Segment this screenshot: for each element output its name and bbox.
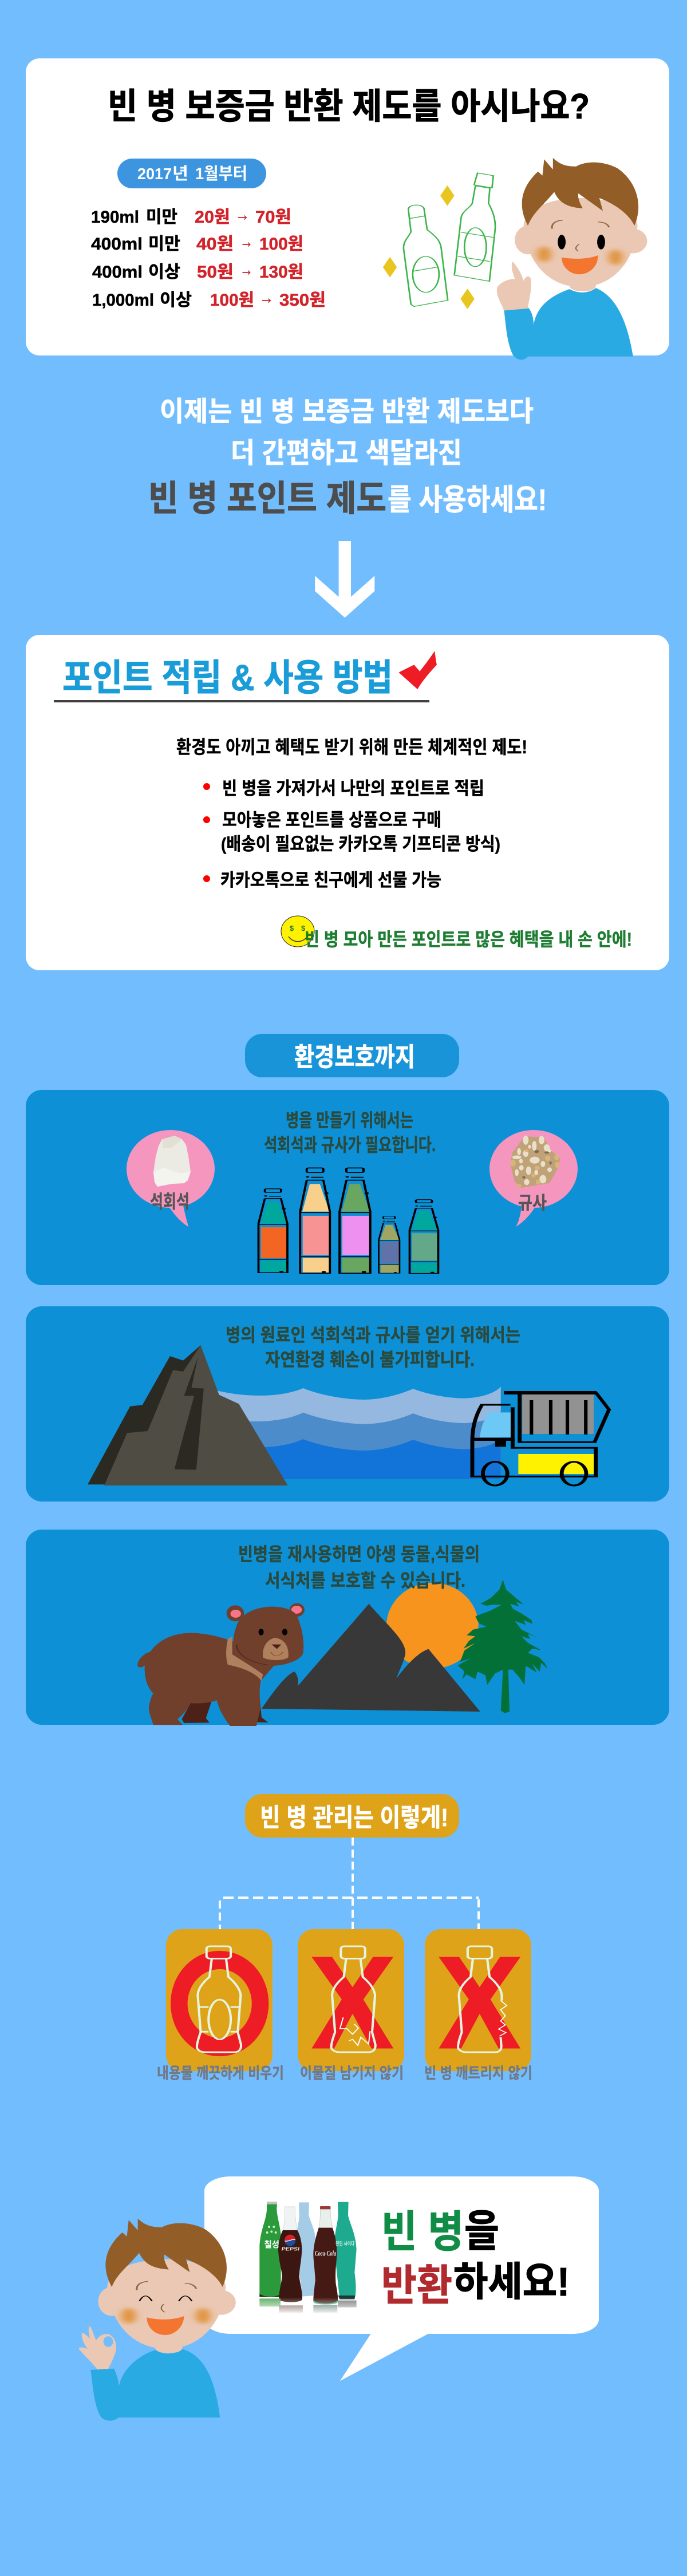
icon: X mark with broken bottle: [439, 1946, 520, 2052]
text block: switch to the point system: 빈 병 포인트 제도: [148, 479, 386, 519]
deposit price list: →: [240, 232, 253, 251]
panel text: [238, 1544, 480, 1591]
panel text: 자연환경 훼손이 불가피합니다.: [265, 1349, 475, 1370]
bubble: silica sand: 규사: [518, 1193, 547, 1213]
badge: since January 2017: 년: [172, 164, 188, 183]
illustration: mountains: [262, 1604, 480, 1712]
heading: 포인트 적립 & 사용 방법: [62, 657, 393, 698]
text block: switch to the point system: 더 간편하고 색달라진: [231, 438, 462, 469]
connector: dashed tree lines: [220, 1838, 479, 1930]
panel text: [226, 1325, 520, 1370]
illustration: pine tree: [458, 1579, 548, 1713]
title: 빈 병 보증금 반환 제도를 아시나요?: [108, 87, 590, 127]
deposit price list: 1,000ml: [92, 291, 154, 310]
illustration: rocky mountain: [88, 1345, 288, 1485]
deposit price list: →: [259, 289, 274, 307]
bubble shape: [204, 2176, 599, 2381]
deposit price list: 50원: [197, 263, 234, 282]
deposit price list: 400ml: [91, 235, 143, 254]
bullet list: 빈 병을 가져가서 나만의 포인트로 적립: [222, 779, 484, 799]
text: return empty bottles: [381, 2207, 570, 2309]
caption: 내용물 깨끗하게 비우기: [157, 2065, 284, 2082]
photo illustration: soda bottles: 천연 사이다: [335, 2241, 355, 2247]
bullet list: [203, 779, 500, 890]
illustration: dump truck: [471, 1391, 609, 1485]
text block: switch to the point system: 를 사용하세요!: [388, 484, 547, 517]
heading underline: [54, 700, 429, 702]
panel background: [26, 1530, 669, 1725]
text: return empty bottles: 반환: [381, 2262, 452, 2309]
panel text: 빈병을 재사용하면 야생 동물,식물의: [238, 1544, 480, 1564]
badge: since January 2017: [117, 159, 266, 188]
bullet list: 카카오톡으로 친구에게 선물 가능: [220, 870, 441, 890]
deposit price list: 미만: [148, 235, 180, 254]
panel background: [26, 635, 669, 970]
photo illustration: soda bottles: PEPSI: [282, 2246, 300, 2251]
illustration: sun: [386, 1583, 479, 1669]
icon: circle mark with bottle: [171, 1946, 269, 2056]
deposit price list: 미만: [146, 208, 177, 227]
photo illustration: soda bottles: Coca-Cola: [315, 2250, 337, 2258]
heading pill: environmental protection: [245, 1034, 459, 1077]
illustration: brown bear: [137, 1603, 305, 1726]
icon: smiling boy with OK hand: [79, 2219, 236, 2421]
deposit price list: →: [235, 206, 250, 224]
icon: money smiley: $: [290, 924, 294, 933]
heading pill: bottle care: 빈 병 관리는 이렇게!: [260, 1804, 448, 1832]
deposit price list: 190ml: [91, 208, 139, 227]
icon: red check mark: [398, 651, 437, 689]
card: do not break bottles: [424, 1929, 532, 2082]
deposit price list: 100원: [210, 291, 254, 310]
panel background: [26, 58, 669, 355]
illustration: waves: [215, 1386, 501, 1479]
icon: X mark with dirty bottle: [311, 1946, 393, 2052]
deposit price list: 40원: [196, 235, 234, 254]
deposit price list: 이상: [148, 263, 180, 282]
intro sentence: 환경도 아끼고 혜택도 받기 위해 만든 체계적인 제도!: [176, 737, 527, 757]
photo illustration: soda bottles: 칠성: [264, 2240, 279, 2250]
panel: environmental damage: [26, 1306, 669, 1502]
text block: switch to the point system: 이제는 빈 병 보증금 반환 제도보다: [160, 397, 534, 427]
text: return empty bottles: 빈 병: [381, 2208, 464, 2257]
deposit price list: 이상: [160, 291, 192, 310]
panel background: [26, 1090, 669, 1285]
text block: switch to the point system: [148, 397, 547, 519]
caption: 빈 병 깨트리지 않기: [424, 2065, 532, 2082]
bubble: limestone: 석회석: [150, 1191, 189, 1212]
bubble: silica sand: [489, 1130, 578, 1227]
icon: money smiley: [281, 916, 314, 947]
panel: how to earn and use points: [26, 635, 669, 970]
green callout: 빈 병 모아 만든 포인트로 많은 혜택을 내 손 안에!: [305, 929, 632, 950]
deposit price list: 400ml: [92, 263, 143, 282]
panel text: 병을 만들기 위해서는: [286, 1110, 413, 1131]
caption: 이물질 남기지 않기: [300, 2065, 404, 2082]
icon: money smiley: $: [301, 924, 306, 933]
text: return empty bottles: 을: [464, 2207, 499, 2256]
icon group: five bottles: [258, 1168, 438, 1273]
deposit price list: 100원: [259, 235, 303, 254]
bullet list: 모아놓은 포인트를 상품으로 구매: [222, 810, 441, 830]
badge: since January 2017: 1월부터: [195, 164, 247, 183]
panel: deposit system intro: [26, 58, 669, 360]
text: return empty bottles: 하세요!: [453, 2259, 570, 2304]
panel text: 석회석과 규사가 필요합니다.: [264, 1135, 436, 1155]
bullet list: (배송이 필요없는 카카오톡 기프티콘 방식): [221, 834, 500, 854]
bubble: limestone: [127, 1130, 215, 1227]
photo illustration: soda bottles: [259, 2202, 358, 2314]
panel: protecting wildlife habitat: [26, 1530, 669, 1726]
deposit price list: 20원: [195, 208, 230, 227]
deposit price list: 70원: [255, 208, 291, 227]
deposit price list: 130원: [259, 263, 303, 282]
panel background: [26, 1306, 669, 1502]
deposit price list: →: [240, 260, 253, 279]
heading pill: bottle care: [245, 1794, 459, 1838]
deposit price list: [91, 206, 326, 310]
panel text: 서식처를 보호할 수 있습니다.: [265, 1570, 465, 1591]
panel text: [264, 1110, 436, 1155]
card: leave no foreign matter: [298, 1929, 404, 2082]
heading pill: environmental protection: 환경보호까지: [294, 1042, 415, 1072]
arrow: down: [315, 541, 374, 618]
icon: boy pointing up: [497, 158, 647, 360]
panel: raw materials for bottles: [26, 1090, 669, 1285]
panel text: 병의 원료인 석회석과 규사를 얻기 위해서는: [226, 1325, 520, 1345]
icon: outlined bottles with sparkles: [383, 173, 495, 309]
badge: since January 2017: 2017: [137, 165, 172, 183]
deposit price list: 350원: [279, 291, 326, 310]
card: empty contents cleanly: [157, 1929, 284, 2082]
speech bubble: return empty bottles: [204, 2176, 599, 2381]
